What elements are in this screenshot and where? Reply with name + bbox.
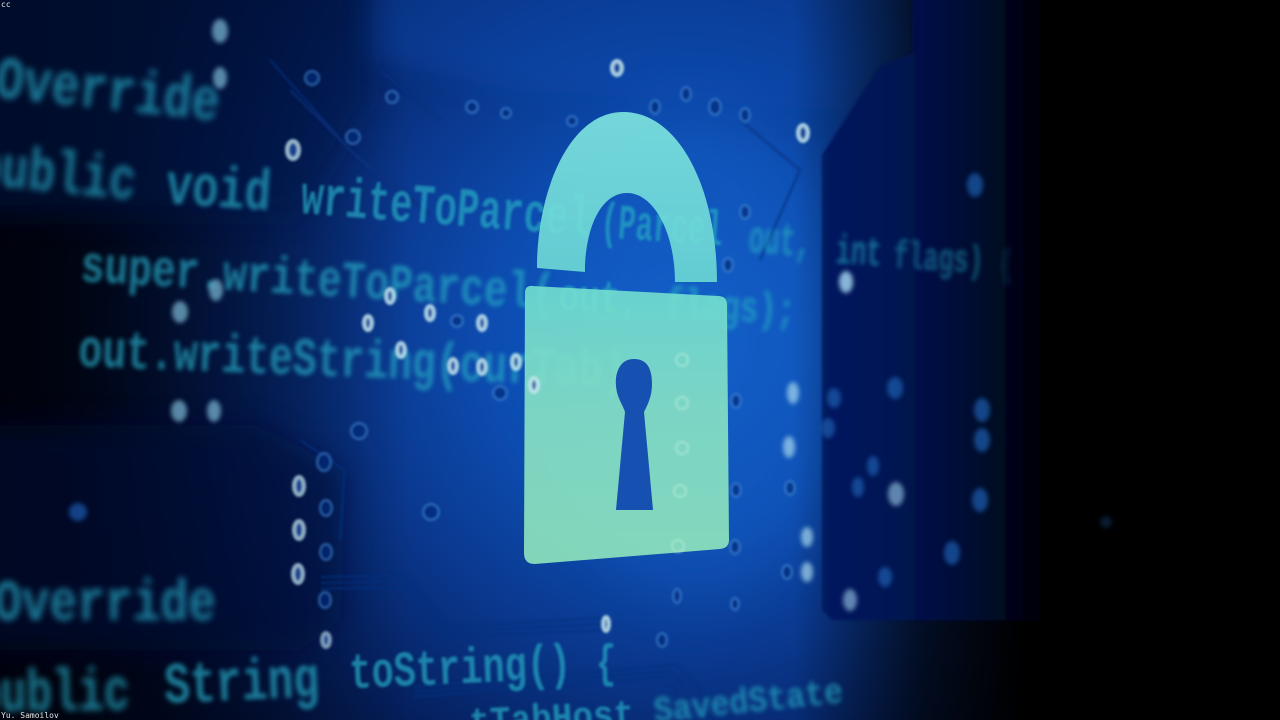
code line: super.writeToParcel: super.writeToParcel( [79,238,557,325]
dark block upper left [0,0,370,215]
code line: public String toString [0,637,616,720]
code line: public String toString: toString() [348,637,572,704]
circuit via dots: dark [305,71,795,647]
circuit via dots: bright [287,61,808,647]
code line: super.writeToParcel: out, [557,272,642,328]
vias on padlock [672,354,688,552]
code line: public void writeToParcel: writeToParcel [299,166,593,253]
dark chip on right [822,0,1280,622]
code line: Override bottom: Override [0,573,216,638]
code line: Override top: Override [0,48,223,139]
code line: public void writeToParcel: int [834,228,883,278]
code line: public void writeToParcel [0,135,1012,288]
code overlay: blurred teal text [0,48,1012,720]
code line: super.writeToParcel: flags); [664,281,797,338]
padlock shackle [537,112,717,282]
code line: public String toString: String [163,649,321,720]
soft glow behind padlock [550,100,850,600]
credit: photographer: Yu. Samoilov [1,711,59,720]
blurred dots: left side [69,19,228,521]
padlock body [524,286,729,564]
code line: public String toString: { [596,639,616,691]
lighter top panel [372,0,912,110]
code line: public void writeToParcel: flags) [892,236,985,286]
code line: public void writeToParcel: void [164,156,273,228]
code line: public void writeToParcel: { [1000,245,1012,288]
keyhole [616,359,653,510]
circuit traces [270,60,800,720]
padlock [524,112,729,564]
code line: TabHost SavedState [468,672,845,720]
blurred dots: right side [783,173,1112,611]
credit: cc: cc [1,0,11,9]
code line: public void writeToParcel: out, [747,214,812,270]
dark circuit block lower left [0,425,345,650]
code line: public void writeToParcel: (Parcel [599,196,725,261]
code line: out.writeString: out.writeString(curTab); [77,322,651,405]
